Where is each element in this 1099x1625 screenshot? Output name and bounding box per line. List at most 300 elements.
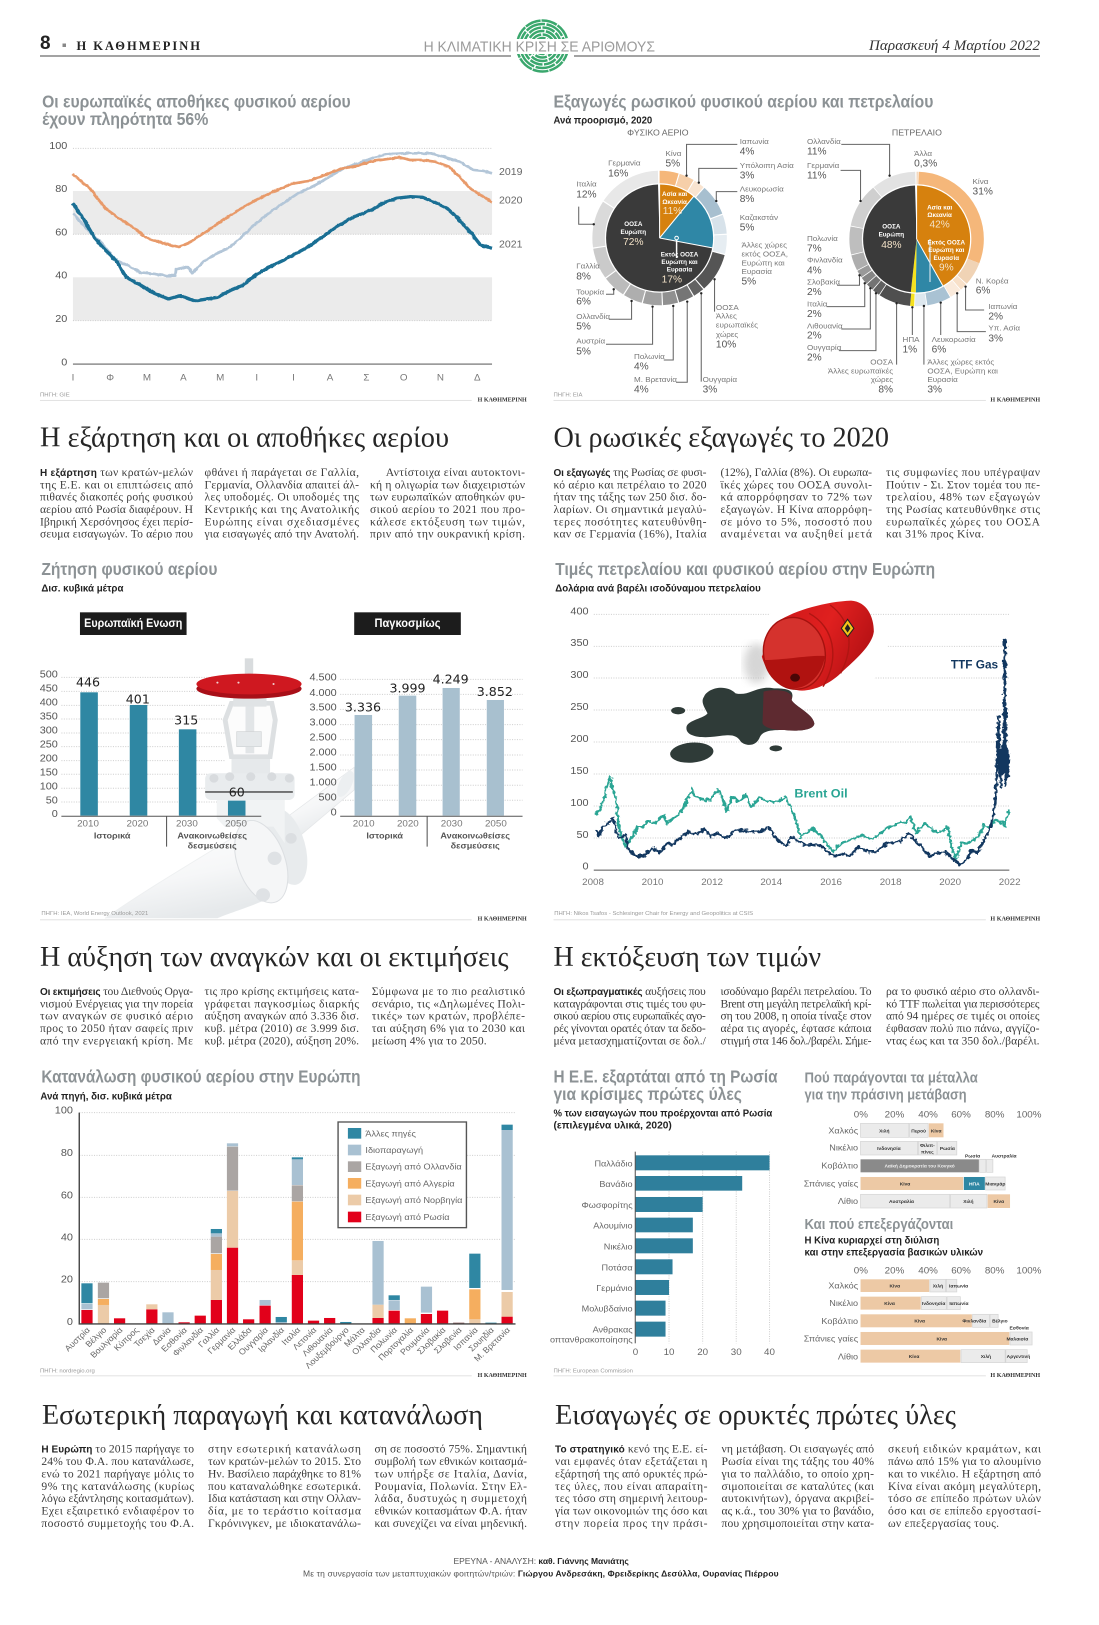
month labels: Α xyxy=(327,373,334,384)
material labels: οπτανθρακοποίησης xyxy=(550,1335,633,1345)
page number: 8 xyxy=(40,33,51,54)
bar: Λετονία xyxy=(308,1321,319,1324)
EU x labels: 2020 xyxy=(127,819,148,830)
body column 2: ϊκές χώρες του ΟΟΣΑ συνολι- xyxy=(720,478,872,491)
line: TTF Gas xyxy=(596,640,1009,865)
y axis labels: 150 xyxy=(570,765,589,777)
body column 2: Ην. Βασίλειο παράχθηκε το 81% xyxy=(208,1467,361,1480)
bar: Ελλάδα xyxy=(243,1319,254,1324)
y axis labels: 0 xyxy=(67,1316,73,1328)
body column 2 xyxy=(720,1443,875,1530)
legend: Εξαγωγή από Ρωσία xyxy=(365,1212,450,1222)
country labels: Μ. Βρετανία xyxy=(472,1325,512,1363)
gas country labels: Άλλες xyxy=(716,312,737,321)
decorative square marker xyxy=(62,44,66,47)
oil country labels: 31% xyxy=(973,187,993,197)
oil country labels: Άλλες χώρες εκτός xyxy=(927,358,994,367)
oil country labels: 11% xyxy=(807,147,827,157)
row: Λίθιο: Χιλή xyxy=(963,1199,974,1205)
row: Σπάνιες γαίες xyxy=(804,1325,1032,1345)
country labels: Βέλγιο xyxy=(83,1325,109,1349)
body column 3: ντας έως και τα 350 δολ./βαρέλι. xyxy=(886,1034,1040,1047)
oil country labels: Πολωνία xyxy=(807,234,838,243)
y axis labels: 250 xyxy=(570,701,589,713)
subtitle: China dominates refining xyxy=(805,1236,984,1259)
EU y axis labels xyxy=(40,669,58,820)
oil country labels: χώρες xyxy=(871,375,893,384)
source note: ΠΗΓΗ: nordregio.org xyxy=(40,1368,95,1374)
gas slice labels: 11% xyxy=(663,206,683,217)
chart title xyxy=(554,1067,778,1104)
body column 3: όσο και σε επίπεδο εργοστασί- xyxy=(888,1505,1041,1518)
panel: gas consumption in Europe stacked bar chart xyxy=(40,1067,527,1379)
body column 3: σενάριο, τις «Δηλωμένες Πολι- xyxy=(372,997,525,1010)
body column 1: πιθανές διακοπές ροής φυσικού xyxy=(40,491,193,504)
gas slice labels: Εκτός ΟΟΣΑ xyxy=(661,251,699,258)
body column 2 xyxy=(204,466,359,541)
body column 1: Οι εξαγωγές της Ρωσίας σε φυσι- xyxy=(554,466,707,479)
body column 1: γία των οικονομιών της όσο και xyxy=(554,1505,708,1518)
body column 2: των κρατών-μελών το 2015. Στο xyxy=(208,1455,361,1468)
gas slice labels: Ευρασία xyxy=(667,267,693,274)
subtitle: China dominates refining: και στην επεξεργασία βασικών υλικών xyxy=(805,1248,984,1259)
body column 2: αέρα τις αγορές, έφτασε κάποια xyxy=(720,1022,872,1035)
body column 3: των ευρωπαϊκών αποθηκών φυ- xyxy=(370,491,525,504)
body column 1: κό αέριο και πετρέλαιο το 2020 xyxy=(554,478,707,491)
bar: Λουξεμβούργο xyxy=(340,1322,351,1324)
body column 3: εθνικών κοιτασμάτων Φ.Α. ήταν xyxy=(374,1505,527,1518)
gas country labels: Πολωνία xyxy=(634,352,665,361)
oil country labels: 2% xyxy=(807,353,822,364)
body column 2: ας κ.ά., του 30% για το βανάδιο, xyxy=(722,1505,874,1518)
page header xyxy=(40,20,1040,72)
production axis labels: 20% xyxy=(885,1110,905,1121)
line: 2019 xyxy=(73,153,492,276)
body column 2 xyxy=(208,1443,361,1530)
body column 1 xyxy=(40,466,194,541)
body column 1: καταγράφονται στις τιμές του φυ- xyxy=(554,997,706,1010)
body column 3: σκευή ειδικών κραμάτων, και xyxy=(888,1443,1042,1456)
credit: Η ΚΑΘΗΜΕΡΙΝΗ xyxy=(990,916,1041,923)
oil slice labels: Εκτός ΟΟΣΑ xyxy=(928,239,966,246)
chart title: Οι ευρωπαϊκές αποθήκες φυσικού αερίου xyxy=(42,92,351,111)
gas country labels: Ιαπωνία xyxy=(740,137,769,146)
oil country labels: Σλοβακία xyxy=(807,278,841,287)
global y axis labels: 500 xyxy=(319,792,337,804)
body column 3: και το νικέλιο. Η εξάρτηση από xyxy=(888,1467,1041,1480)
leader lines xyxy=(579,144,986,382)
global y axis labels: 2.500 xyxy=(309,732,337,744)
oil country labels: ΗΠΑ xyxy=(903,335,920,344)
chart title line two: έχουν πληρότητα 56% xyxy=(42,109,208,129)
production axis labels: 100% xyxy=(1016,1110,1042,1121)
EU axis xyxy=(61,816,261,847)
gas country labels: Κίνα xyxy=(666,149,682,158)
illustration: spilled oil barrel xyxy=(669,598,888,764)
series labels: 2021 xyxy=(499,240,523,250)
month labels xyxy=(72,373,481,384)
EU x labels: 2050 xyxy=(225,819,247,830)
body column 1: ναι εμφανές όταν εξετάζεται η xyxy=(555,1455,708,1468)
EU y axis labels: 50 xyxy=(46,795,58,806)
shaded band 60-80 xyxy=(73,191,492,234)
source note: ΠΗΓΗ: EIA xyxy=(554,393,583,399)
body column 3: Ρουμανία, Πολωνία. Στην Ελ- xyxy=(374,1480,527,1493)
country labels: Ιταλία xyxy=(279,1325,302,1347)
material labels: Νικέλιο xyxy=(604,1242,633,1251)
row: Χαλκός xyxy=(828,1123,944,1137)
global y axis labels xyxy=(309,672,337,819)
body column 1: μένα μετασχηματίζονται σε δολ./ xyxy=(554,1034,707,1047)
body column 1: ενώ το 2021 παρήγαγε μόλις το xyxy=(41,1467,194,1480)
heading: Εισαγωγές σε ορυκτές πρώτες ύλες xyxy=(555,1399,957,1431)
EU y axis labels: 400 xyxy=(40,697,58,709)
gas country labels: ΟΟΣΑ xyxy=(716,303,740,312)
global x labels xyxy=(353,819,510,851)
gas country labels: Άλλες χώρες xyxy=(742,241,787,250)
y axis labels: 60 xyxy=(61,1190,73,1201)
EU bar values: 446 xyxy=(76,676,100,690)
body column 2: λες υποδομές. Οι υποδομές της xyxy=(204,491,359,504)
body column 3: ευρωπαϊκές χώρες του ΟΟΣΑ xyxy=(886,515,1041,528)
body column 3: Κίνα είναι ακόμη μεγαλύτερη, xyxy=(888,1480,1041,1493)
body column 2 xyxy=(720,985,872,1047)
x labels: 2020 xyxy=(939,877,961,888)
bar x labels: 30 xyxy=(731,1347,742,1358)
body column 2: κά απορρόφησαν το 72% των xyxy=(720,491,872,504)
credit: Η ΚΑΘΗΜΕΡΙΝΗ xyxy=(990,397,1041,404)
row: Κοβάλτιο xyxy=(821,1153,1017,1172)
gas country labels: Γερμανία xyxy=(608,159,641,168)
country labels: Λιθουανία xyxy=(300,1325,335,1358)
row: Χαλκός: Χαλκός xyxy=(828,1126,858,1135)
body column 3: και συνεχίζει να είναι μηδενική. xyxy=(374,1517,527,1530)
header rule right xyxy=(574,55,1040,57)
row: Κοβάλτιο: Ρωσία xyxy=(965,1153,980,1159)
bar x labels xyxy=(633,1347,775,1358)
row: Χαλκός: Κίνα xyxy=(931,1128,942,1134)
panel: natural gas demand bar charts with valve illustration xyxy=(40,559,527,923)
row: Κοβάλτιο: Κοβάλτιο xyxy=(821,1161,858,1170)
global y axis labels: 3.000 xyxy=(309,717,337,729)
body column 2: Γερμανία, Ολλανδία απαιτεί άλ- xyxy=(204,478,359,491)
bar: Ουγγαρία xyxy=(260,1300,271,1324)
row: Σπάνιες γαίες: Μαλαισία xyxy=(1006,1337,1028,1343)
row: Λίθιο: Αργεντινή xyxy=(1007,1354,1030,1360)
heading: where they are processed: Και πού επεξεργάζονται xyxy=(805,1216,953,1233)
chart subtitle: % των εισαγωγών που προέρχονται από Ρωσία xyxy=(554,1109,772,1120)
EU y axis labels: 150 xyxy=(40,767,58,778)
oil slice labels: ΟΟΣΑ xyxy=(882,224,901,231)
article: dependence and storage xyxy=(40,422,525,541)
oil country labels: 4% xyxy=(807,266,822,276)
global y axis labels: 3.500 xyxy=(309,702,337,714)
gas country labels: 16% xyxy=(608,169,629,180)
oil slice labels: 42% xyxy=(930,220,950,230)
month labels: Ν xyxy=(437,373,444,384)
gas slice labels: 72% xyxy=(623,237,644,248)
oil slice labels: 48% xyxy=(881,240,902,251)
EU bar values: 60 xyxy=(229,786,245,800)
processing axis labels: 40% xyxy=(918,1266,938,1276)
y axis labels: 20 xyxy=(55,313,67,325)
gas country labels: Γαλλία xyxy=(576,262,600,271)
oil country labels: 2% xyxy=(807,331,822,342)
EU bars xyxy=(80,692,245,816)
global y axis labels: 0 xyxy=(331,807,337,819)
chart subtitle: Δισ. κυβικά μέτρα xyxy=(41,584,123,595)
article: Russian exports 2020 xyxy=(554,422,1041,541)
credit: Η ΚΑΘΗΜΕΡΙΝΗ xyxy=(478,916,527,923)
legend: Εξαγωγή από Αλγερία xyxy=(365,1179,455,1188)
EU bar values xyxy=(76,676,245,800)
EU x labels: Ανακοινωθείσες xyxy=(177,831,247,841)
gas country labels: 5% xyxy=(576,346,591,357)
body column 3: έφθασαν πολύ πιο πάνω, αγγίζο- xyxy=(886,1022,1040,1035)
country labels: Κύπρος xyxy=(112,1325,141,1353)
y axis labels: 400 xyxy=(570,606,589,617)
global bar values: 3.999 xyxy=(389,682,426,695)
oil country labels: ΟΟΣΑ xyxy=(870,358,894,367)
country labels: Πορτογαλία xyxy=(376,1325,415,1362)
oil country labels: Υπ. Ασία xyxy=(988,324,1021,333)
row: Κοβάλτιο: Φινλανδία xyxy=(962,1319,986,1325)
body column 2: στην εσωτερική κατανάλωση xyxy=(208,1443,361,1456)
material labels: Παλλάδιο xyxy=(594,1159,633,1168)
panel: oil and gas prices line chart with barrel xyxy=(554,559,1041,923)
row: Χαλκός: Χιλή xyxy=(933,1283,943,1289)
body column 2: σιμοποιείται σε καταλύτες (και xyxy=(722,1480,875,1493)
chart title: Τιμές πετρελαίου και φυσικού αερίου στην Ευρώπη xyxy=(555,559,935,579)
date: Παρασκευή 4 Μαρτίου 2022 xyxy=(868,38,1040,54)
processing stacked bars xyxy=(804,1279,1032,1363)
body column 2: Κεντρικής και της Ανατολικής xyxy=(204,503,359,516)
x labels: 2018 xyxy=(880,877,902,888)
gas country labels: 4% xyxy=(740,147,755,157)
gas slice labels xyxy=(621,191,699,286)
body column 3: Αντίστοιχα είναι αυτοκτονι- xyxy=(386,466,525,479)
panel: Russian gas and oil exports donut charts xyxy=(554,92,1041,404)
body column 1 xyxy=(40,985,193,1047)
article: price surge xyxy=(554,941,1040,1047)
EU bar values: 315 xyxy=(174,714,198,727)
x labels: 2022 xyxy=(999,877,1021,888)
country labels: Λετονία xyxy=(290,1325,319,1352)
source note: ΠΗΓΗ: GIE xyxy=(40,393,70,399)
y axis labels xyxy=(570,606,589,872)
body column 3: λάδα, δυστυχώς η συμμετοχή xyxy=(374,1492,527,1505)
EU x labels xyxy=(77,819,247,851)
legend: Άλλες πηγές xyxy=(365,1129,416,1138)
oil country labels: 3% xyxy=(988,333,1003,344)
EU y axis labels: 100 xyxy=(40,781,58,792)
label box: global xyxy=(354,612,461,635)
body column 2: Ιδια κατάσταση και στην Ολλαν- xyxy=(208,1492,361,1505)
x labels: 2010 xyxy=(642,877,663,888)
oil slice labels: 9% xyxy=(939,263,954,274)
oil country labels: Ουγγαρία xyxy=(807,343,842,352)
illustration: valve and pipe xyxy=(105,658,357,918)
heading: Η εξάρτηση και οι αποθήκες αερίου xyxy=(40,422,449,454)
row: Σπάνιες γαίες: Μιανμάρ xyxy=(985,1182,1005,1188)
newspaper name: Η ΚΑΘΗΜΕΡΙΝΗ xyxy=(76,39,200,53)
body column 1: στην πορεία προς την πράσι- xyxy=(555,1517,708,1530)
gas slice labels: ΟΟΣΑ xyxy=(624,221,643,228)
bar: Σουηδία xyxy=(485,1323,497,1324)
row: Χαλκός: Χαλκός xyxy=(828,1281,858,1290)
country labels: Τσεχία xyxy=(132,1325,157,1349)
row: Νικέλιο: Κίνα xyxy=(884,1301,895,1307)
bar axis xyxy=(635,1152,636,1343)
y axis labels: 60 xyxy=(55,227,67,238)
country labels: Σλοβακία xyxy=(415,1325,448,1356)
gas slice labels: Ωκεανία xyxy=(662,199,687,206)
gas country labels: 4% xyxy=(634,361,649,372)
body column 1: της Ε.Ε. και οι επιπτώσεις από xyxy=(40,478,193,491)
body column 3 xyxy=(372,985,526,1047)
oil slice labels: Ευρώπη και xyxy=(928,247,965,254)
gas country labels: Μ. Βρετανία xyxy=(634,375,677,384)
series labels xyxy=(499,167,523,250)
EU y axis labels: 450 xyxy=(40,683,58,695)
body column 2 xyxy=(720,466,872,541)
material labels: Φωσφορίτης xyxy=(581,1200,633,1210)
oil country labels: 6% xyxy=(932,345,946,356)
oil country labels: ΟΟΣΑ, Ευρώπη και xyxy=(927,366,998,375)
country labels: Εσθονία xyxy=(159,1325,189,1354)
panel: European gas storage line chart xyxy=(40,92,527,404)
header rule left xyxy=(40,55,511,57)
row: Νικέλιο: Ιαπωνία xyxy=(949,1301,969,1307)
bar x labels: 10 xyxy=(664,1347,674,1358)
bar: Τσεχία xyxy=(146,1304,157,1324)
country labels: Μάλτα xyxy=(342,1325,367,1349)
oil country labels: Ν. Κορέα xyxy=(976,276,1009,285)
body column 3: ρα το φυσικό αέριο στο ολλανδι- xyxy=(886,985,1040,998)
body column 1: Η εξάρτηση των κρατών-μελών xyxy=(40,466,193,479)
body column 3 xyxy=(370,466,525,541)
y axis labels: 50 xyxy=(576,829,589,841)
bar: Εσθονία xyxy=(179,1322,190,1324)
country labels xyxy=(62,1325,512,1371)
y axis labels: 300 xyxy=(570,669,589,681)
body column 3: των υπήρξε σε Ιταλία, Δανία, xyxy=(374,1467,527,1480)
y axis labels: 200 xyxy=(570,733,589,745)
row: Λίθιο xyxy=(838,1350,1030,1363)
bar: Ιρλανδία xyxy=(276,1317,287,1324)
oil country labels: 1% xyxy=(903,345,917,356)
article: rising needs and estimates xyxy=(40,941,526,1047)
processing axis labels: 100% xyxy=(1016,1266,1042,1276)
shaded band 20-40 xyxy=(73,277,492,321)
row: Σπάνιες γαίες: Σπάνιες γαίες xyxy=(804,1179,858,1189)
gas country labels: χώρες xyxy=(716,330,739,339)
body column 1: λόγω εξάντλησης κοιτασμάτων). xyxy=(41,1492,194,1505)
label box: EU xyxy=(80,612,187,635)
global bar values: 4.249 xyxy=(433,673,469,686)
global bars xyxy=(355,688,504,816)
EU y axis labels: 200 xyxy=(40,753,58,764)
country labels: Ολλανδία xyxy=(350,1325,383,1357)
label box: global: Παγκοσμίως xyxy=(375,616,440,630)
global y axis labels: 2.000 xyxy=(309,747,337,758)
body column 2: φθάνει ή παράγεται σε Γαλλία, xyxy=(204,466,359,479)
country labels: Βουλγαρία xyxy=(88,1325,125,1360)
country labels: Φινλανδία xyxy=(170,1325,205,1358)
global x labels: δεσμεύσεις xyxy=(451,841,500,851)
material labels: Αλουμίνιο xyxy=(593,1221,633,1231)
row: Χαλκός: Χιλή xyxy=(879,1128,890,1134)
oil country labels: 2% xyxy=(988,312,1003,322)
bar x labels: 40 xyxy=(764,1347,775,1358)
body column 3: κό TTF πωλείται για περισσότερες xyxy=(886,997,1040,1010)
row: Σπάνιες γαίες: Εσθονία xyxy=(1009,1325,1029,1331)
y axis labels: 80 xyxy=(61,1147,73,1159)
gas country labels: Λευκορωσία xyxy=(740,185,784,194)
heading: where metals are produced xyxy=(805,1070,978,1103)
oil country labels: 2% xyxy=(807,309,822,320)
body column 2: για εισαγωγές από την Ανατολή. xyxy=(204,528,359,541)
global bar values xyxy=(345,673,513,715)
body column 1: Η Ευρώπη το 2015 παρήγαγε το xyxy=(41,1443,194,1456)
gas country labels: 3% xyxy=(740,171,755,181)
body column 1: λαρίων. Οι σημαντικά μεγαλύ- xyxy=(554,503,707,516)
donut labels and leaders xyxy=(554,92,1041,404)
oil slice labels xyxy=(879,204,966,274)
gas slice labels: Ευρώπη xyxy=(621,229,646,236)
material labels: Ανθρακας xyxy=(593,1325,633,1334)
heading: where metals are produced: Πού παράγονται τα μέταλλα xyxy=(805,1070,978,1087)
gas country labels: Ουγγαρία xyxy=(703,375,738,384)
body column 3: Σύμφωνα με το πιο ρεαλιστικό xyxy=(372,985,525,998)
body column 2: εξαγωγών. Η Κίνα απορρόφη- xyxy=(720,503,872,516)
bar: Βουλγαρία xyxy=(114,1318,125,1324)
body column 2: σε μόνο το 5%, ποσοστό που xyxy=(720,515,872,528)
row: Κοβάλτιο xyxy=(821,1314,1008,1327)
y axis labels: 350 xyxy=(570,637,589,649)
label: Brent Oil: Brent Oil xyxy=(794,787,848,801)
gas country labels: 10% xyxy=(716,339,736,350)
chart subtitle: (επιλεγμένα υλικά, 2020) xyxy=(554,1121,672,1132)
bar: Πολωνία xyxy=(389,1295,400,1324)
oil country labels: 7% xyxy=(807,244,822,255)
source note: ΠΗΓΗ: European Commission xyxy=(554,1368,633,1374)
bar: Λιθουανία xyxy=(324,1318,335,1324)
bar: Γερμανία xyxy=(227,1143,238,1324)
legend: Ιδιοπαραγωγή xyxy=(365,1145,423,1155)
y axis labels: 0 xyxy=(61,357,67,368)
gas country labels: Τουρκία xyxy=(576,287,605,296)
bar: Φινλανδία xyxy=(195,1316,206,1324)
oil country labels: Ιαπωνία xyxy=(988,302,1018,311)
EU x labels: 2010 xyxy=(77,819,99,830)
EU bar values: 401 xyxy=(126,693,150,706)
material labels: Γερμάνιο xyxy=(596,1283,633,1293)
article: imports of mineral raw materials xyxy=(554,1399,1042,1530)
row: Νικέλιο: Ινδονησία xyxy=(922,1301,945,1307)
gas country labels: 5% xyxy=(742,277,756,288)
body column 3: σικού αερίου το 2021 που προ- xyxy=(370,503,525,516)
chart title: Ζήτηση φυσικού αερίου xyxy=(41,559,217,579)
row: Νικέλιο: Φιλιπ- xyxy=(920,1143,935,1149)
row: Χαλκός: Κίνα xyxy=(890,1283,900,1289)
bar: Πορτογαλία xyxy=(405,1318,416,1324)
row: Νικέλιο: Νικέλιο xyxy=(829,1143,858,1153)
body column 1: νισμού Ενέργειας για την πορεία xyxy=(40,997,193,1010)
bar: Βέλγιο xyxy=(98,1283,109,1324)
series labels: 2020 xyxy=(499,196,523,206)
body column 3: της Ρωσίας κατευθύνθηκε στις xyxy=(886,503,1040,516)
